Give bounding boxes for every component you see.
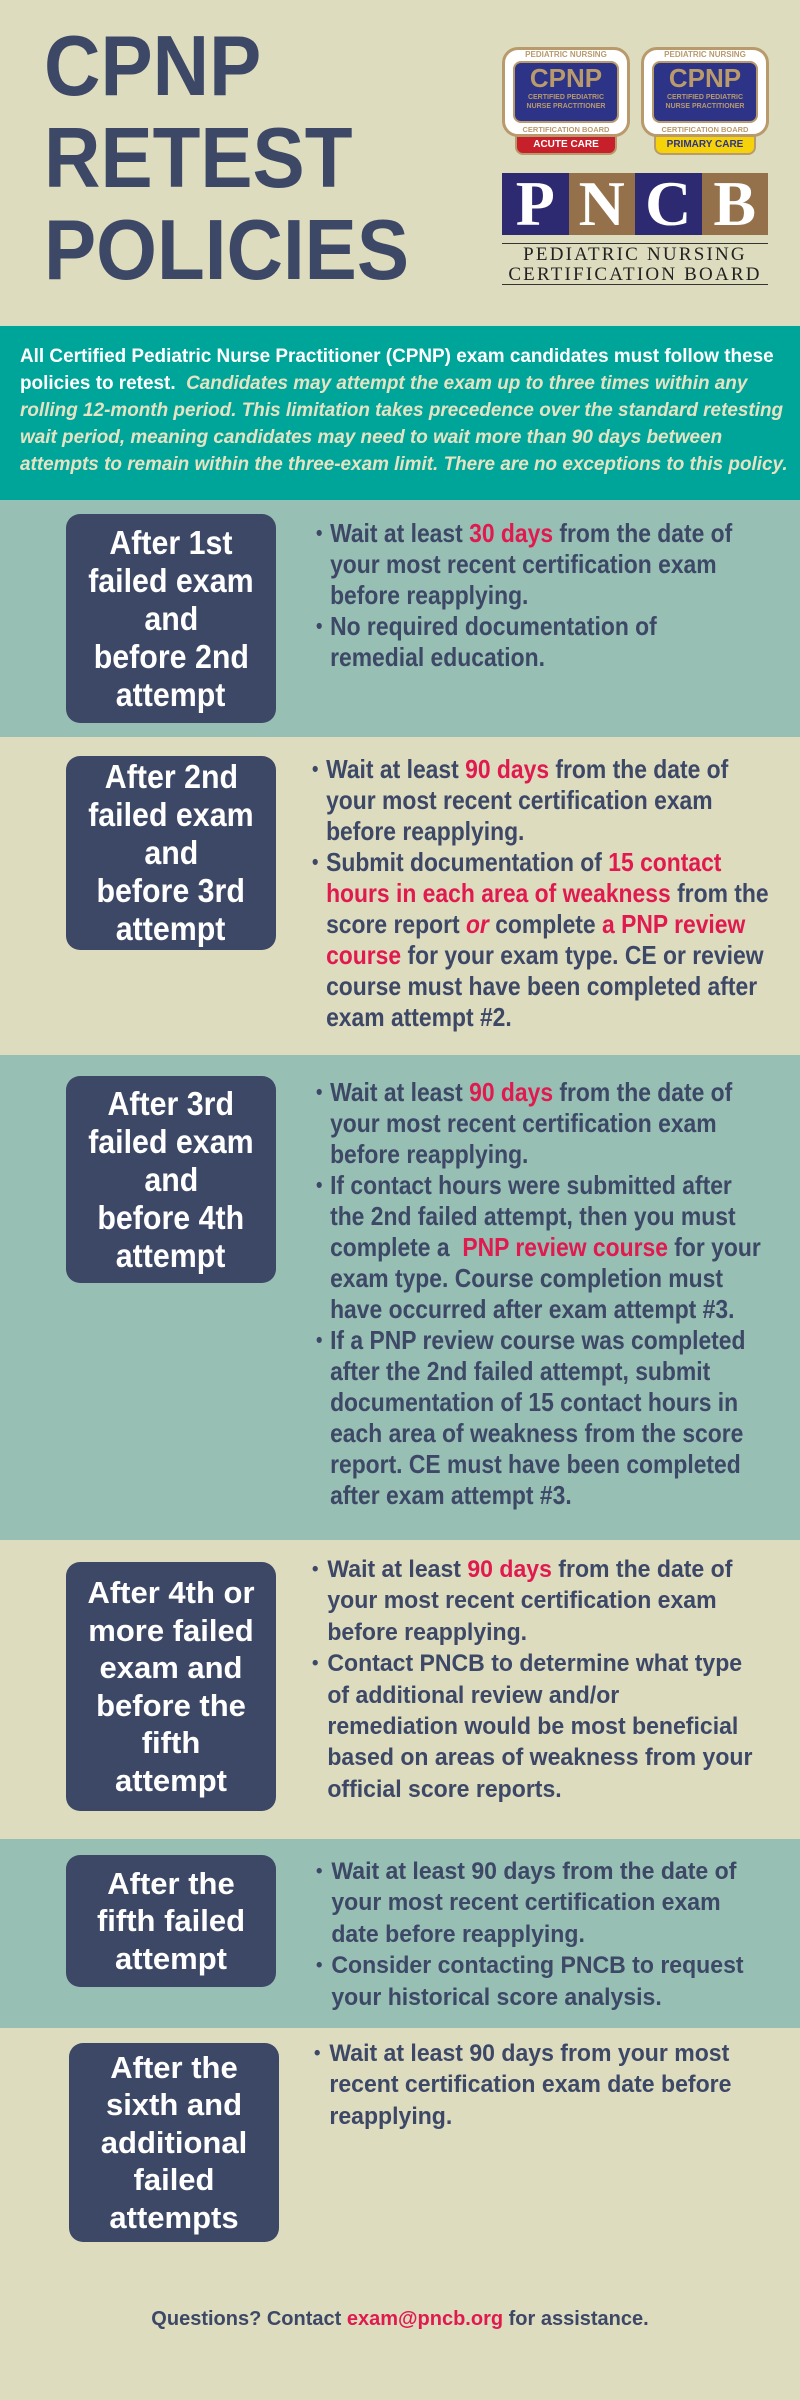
title: POLICIES <box>44 203 409 298</box>
badge: acute care: PEDIATRIC NURSING <box>525 50 607 59</box>
intro text: All Certified Pediatric Nurse Practitioner (CPNP) exam candidates must follow these <box>20 345 774 367</box>
text 5: date before reapplying. <box>331 1921 585 1948</box>
badge: acute care <box>502 47 630 155</box>
label box 4: more failed <box>88 1612 254 1648</box>
label box 6: sixth and <box>106 2087 242 2122</box>
text 2: course for your exam type. CE or review <box>326 940 764 970</box>
label box 4: before the <box>96 1688 246 1722</box>
text 4: before reapplying. <box>327 1619 527 1646</box>
label box 6: attempts <box>109 2200 239 2235</box>
text 3: before reapplying. <box>330 1139 528 1169</box>
label box 3 <box>66 1076 276 1283</box>
text 3: after exam attempt #3. <box>330 1480 572 1510</box>
text 4: of additional review and/or <box>327 1682 619 1709</box>
text 6: reapplying. <box>329 2103 452 2130</box>
label box 1: After 1st <box>109 524 233 560</box>
label box 2: and <box>144 834 198 871</box>
text 1: remedial education. <box>330 642 545 672</box>
text 3: the 2nd failed attempt, then you must <box>330 1201 736 1231</box>
text 2: your most recent certification exam <box>326 785 713 815</box>
text 3: exam type. Course completion must <box>330 1263 723 1293</box>
text 1 <box>316 518 732 672</box>
text 2: hours in each area of weakness from the <box>326 878 769 908</box>
title: RETEST <box>44 111 352 206</box>
text 3: documentation of 15 contact hours in <box>330 1387 738 1417</box>
label box 4: fifth <box>142 1725 200 1760</box>
text 2: score report or complete a PNP review <box>326 909 745 939</box>
label box 4: After 4th or <box>87 1575 255 1610</box>
badge: primary care: NURSE PRACTITIONER <box>666 103 744 110</box>
logo: PNCB: N <box>579 168 625 239</box>
intro text: attempts to remain within the three-exam limit. There are no exceptions to this policy. <box>20 453 788 475</box>
text 6 <box>314 2040 731 2130</box>
logo: PNCB: C <box>645 168 691 239</box>
label box 1: and <box>144 600 198 636</box>
badge: primary care: PEDIATRIC NURSING <box>664 50 746 59</box>
text 1: Wait at least 30 days from the date of <box>330 518 732 548</box>
label box 3: After 3rd <box>108 1084 234 1122</box>
intro band <box>0 326 800 500</box>
intro text: rolling 12-month period. This limitation takes precedence over the standard retesting <box>20 399 783 421</box>
text 2: before reapplying. <box>326 816 524 846</box>
label box 5: fifth failed <box>97 1903 245 1938</box>
text 3 <box>316 1077 761 1510</box>
label box 4 <box>66 1562 276 1811</box>
label box 6: After the <box>110 2050 238 2085</box>
section 5 <box>0 1839 800 2028</box>
text 5: Wait at least 90 days from the date of <box>331 1858 736 1885</box>
text 4: Contact PNCB to determine what type <box>327 1650 742 1677</box>
logo: PNCB: B <box>713 168 756 239</box>
label box 6 <box>69 2043 279 2242</box>
text 3: report. CE must have been completed <box>330 1449 741 1479</box>
label box 1: attempt <box>116 676 226 712</box>
text 3: If a PNP review course was completed <box>330 1325 745 1355</box>
intro text: wait period, meaning candidates may need to wait more than 90 days between <box>20 426 722 448</box>
title <box>44 19 409 298</box>
label box 6: additional <box>101 2125 247 2160</box>
text 1: your most recent certification exam <box>330 549 717 579</box>
label box 5: attempt <box>115 1941 227 1976</box>
text 4 <box>312 1556 752 1803</box>
badge: primary care: CERTIFIED PEDIATRIC <box>667 94 743 101</box>
badge: acute care: CERTIFICATION BOARD <box>523 125 609 134</box>
logo: PNCB: P <box>516 168 555 239</box>
label box 3: failed exam <box>88 1122 254 1160</box>
text 1: before reapplying. <box>330 580 528 610</box>
footer: Questions? Contact exam@pncb.org for assistance. <box>151 2308 649 2330</box>
text 4: based on areas of weakness from your <box>327 1744 752 1771</box>
section 2 <box>0 737 800 1055</box>
label box 2: attempt <box>116 910 226 947</box>
badge: primary care: CERTIFICATION BOARD <box>662 125 748 134</box>
label box 3: attempt <box>116 1236 226 1274</box>
text 6: Wait at least 90 days from your most <box>329 2040 729 2067</box>
logo: PNCB: CERTIFICATION BOARD <box>508 264 762 285</box>
text 4: official score reports. <box>327 1776 562 1803</box>
intro text <box>20 345 788 475</box>
text 3: complete a PNP review course for your <box>330 1232 761 1262</box>
label box 3: and <box>144 1160 198 1198</box>
section 1 <box>0 500 800 737</box>
label box 1 <box>66 514 276 723</box>
label box 5: After the <box>107 1866 235 1901</box>
label box 4: attempt <box>115 1762 227 1798</box>
text 5: Consider contacting PNCB to request <box>331 1952 744 1979</box>
badge: acute care: CPNP <box>530 63 602 93</box>
logo: PNCB: PEDIATRIC NURSING <box>523 244 747 265</box>
logo: PNCB <box>502 168 768 285</box>
title: CPNP <box>44 19 261 114</box>
text 2 <box>312 754 769 1032</box>
text 3: Wait at least 90 days from the date of <box>330 1077 732 1107</box>
text 1: No required documentation of <box>330 611 657 641</box>
text 4: remediation would be most beneficial <box>327 1713 738 1740</box>
text 5: your historical score analysis. <box>331 1984 662 2011</box>
section 3 <box>0 1055 800 1540</box>
text 3: have occurred after exam attempt #3. <box>330 1294 734 1324</box>
text 2: Submit documentation of 15 contact <box>326 847 721 877</box>
label box 6: failed <box>134 2162 214 2197</box>
text 2: course must have been completed after <box>326 971 757 1001</box>
intro text: policies to retest. Candidates may attempt the exam up to three times within any <box>20 372 747 394</box>
badge: acute care: ACUTE CARE <box>533 139 599 150</box>
text 3: your most recent certification exam <box>330 1108 717 1138</box>
badge: primary care <box>641 47 769 155</box>
text 5: your most recent certification exam <box>331 1889 721 1916</box>
label box 3: before 4th <box>98 1198 244 1236</box>
text 2: exam attempt #2. <box>326 1002 512 1032</box>
badge: acute care: NURSE PRACTITIONER <box>527 103 605 110</box>
text 6: recent certification exam date before <box>329 2071 731 2098</box>
badge: primary care: PRIMARY CARE <box>667 139 743 150</box>
badge: acute care: CERTIFIED PEDIATRIC <box>528 94 604 101</box>
text 2: Wait at least 90 days from the date of <box>326 754 728 784</box>
text 3: If contact hours were submitted after <box>330 1170 732 1200</box>
label box 2 <box>66 756 276 950</box>
label box 1: before 2nd <box>93 638 249 674</box>
label box 2: failed exam <box>88 796 254 833</box>
section 4 <box>0 1540 800 1839</box>
text 5 <box>316 1858 744 2011</box>
text 4: Wait at least 90 days from the date of <box>327 1556 732 1583</box>
section 6 <box>0 2028 800 2400</box>
label box 4: exam and <box>99 1650 242 1685</box>
label box 1: failed exam <box>88 562 254 598</box>
label box 5 <box>66 1855 276 1987</box>
text 3: each area of weakness from the score <box>330 1418 743 1448</box>
label box 2: before 3rd <box>97 872 245 909</box>
text 4: your most recent certification exam <box>327 1587 717 1614</box>
label box 2: After 2nd <box>104 758 238 795</box>
text 3: after the 2nd failed attempt, submit <box>330 1356 710 1386</box>
badge: primary care: CPNP <box>669 63 741 93</box>
